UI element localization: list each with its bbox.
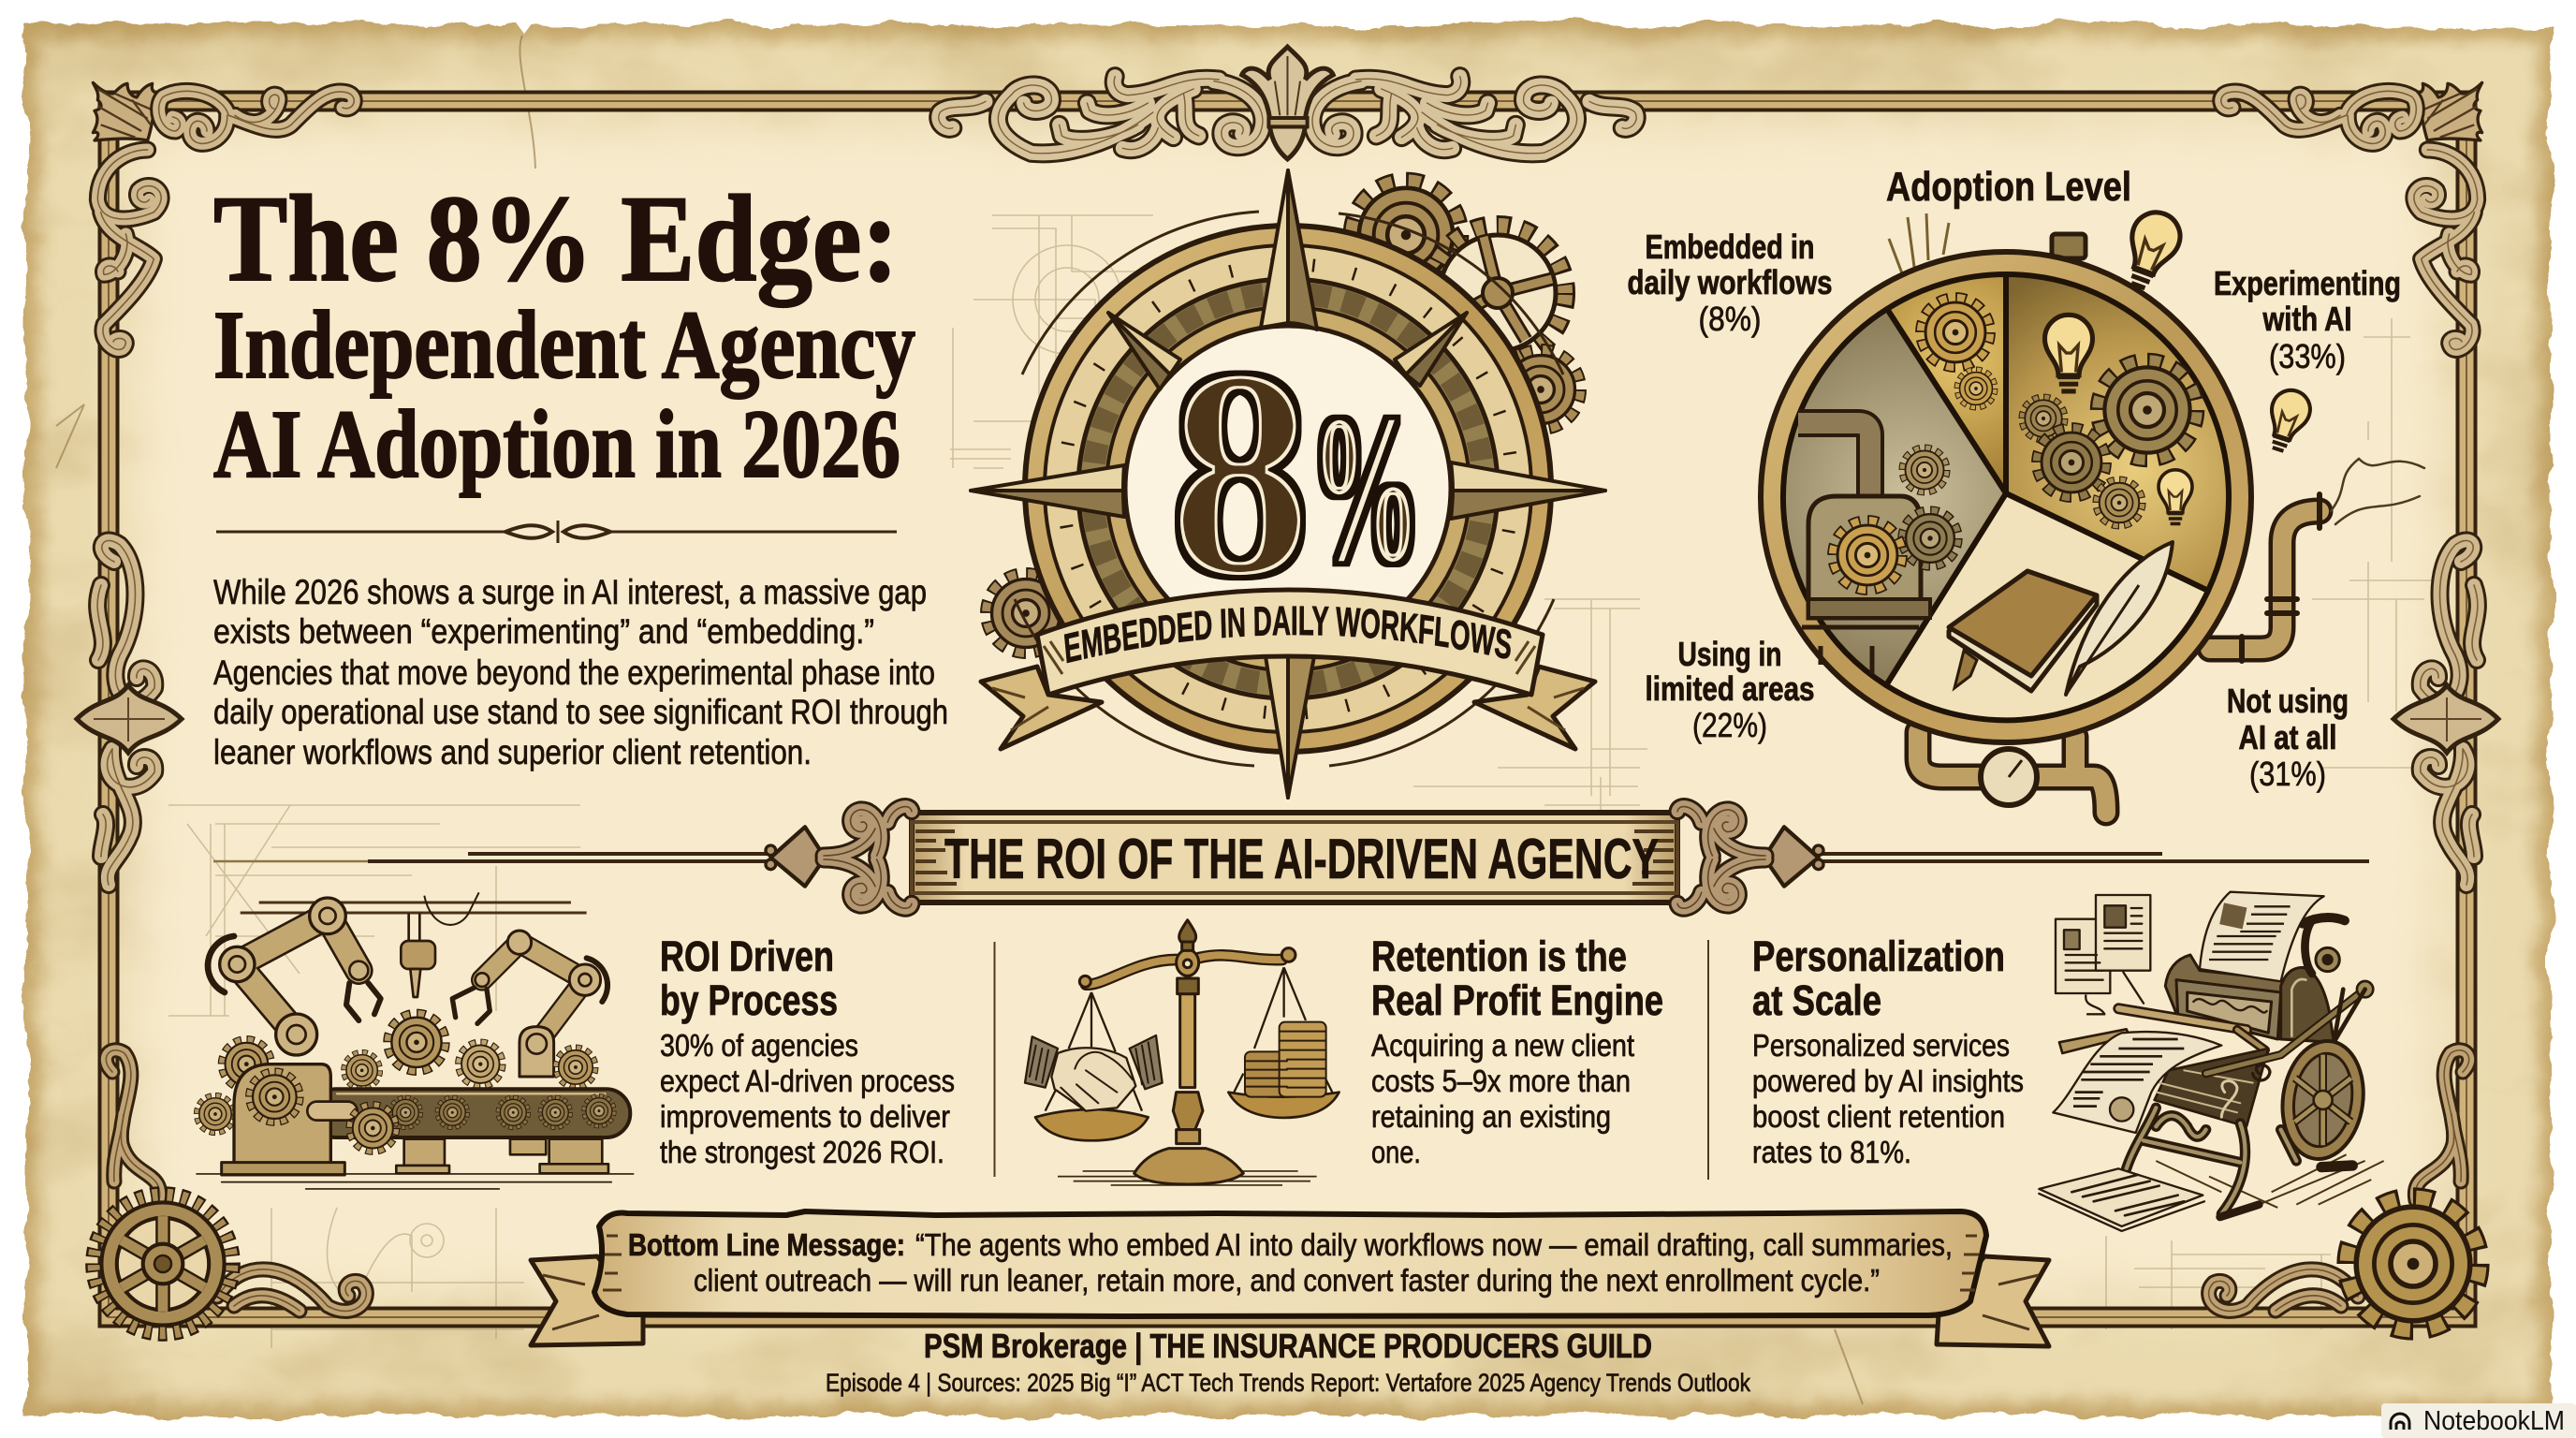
card: retention is the real profit engine: Real Profit Engine	[1371, 976, 1663, 1024]
title: The 8% Edge:	[213, 169, 899, 307]
intro paragraph: leaner workflows and superior client retention.	[213, 733, 812, 771]
arm: right	[452, 931, 607, 1077]
big 8% figure	[1170, 308, 1421, 638]
label: limited: Using in	[1677, 635, 1782, 673]
big 8% figure: 8	[1170, 308, 1310, 638]
label: experimenting: (33%)	[2269, 337, 2346, 375]
corner gear: bottom right	[2209, 1050, 2478, 1328]
title: Independent Agency	[213, 291, 915, 399]
label: not using: (31%)	[2249, 755, 2326, 793]
floor hatching	[2156, 1154, 2384, 1208]
card: personalization at scale	[1752, 932, 2024, 1169]
pie rim	[1761, 252, 2251, 742]
message text: client outreach — will run leaner, retain more, and convert faster during the next enrollment cycle.”	[694, 1263, 1880, 1298]
intro paragraph: daily operational use stand to see significant ROI through	[213, 693, 948, 731]
card: personalization at scale: at Scale	[1752, 976, 1881, 1024]
card: retention is the real profit engine	[1371, 932, 1663, 1169]
card: ROI driven by process	[660, 932, 955, 1169]
card: retention is the real profit engine: Acquiring a new client	[1371, 1028, 1634, 1063]
banner scroll: right	[1677, 807, 1823, 908]
gears	[198, 1014, 595, 1132]
illustration: robot arms on gear conveyor	[197, 892, 634, 1189]
card: retention is the real profit engine: Retention is the	[1371, 932, 1627, 980]
intro paragraph: Agencies that move beyond the experimental phase into	[213, 653, 935, 692]
compass medallion: 8% embedded in daily workflows	[792, 169, 1607, 835]
scale hangers	[1046, 967, 1332, 1111]
corner ornament: top right	[2221, 82, 2482, 349]
label: not using	[2227, 682, 2349, 793]
title: AI Adoption in 2026	[213, 390, 900, 498]
corner gear: bottom left	[95, 1050, 366, 1331]
steam pipes and fittings	[1918, 459, 2424, 813]
floating documents	[2056, 895, 2150, 1014]
label: experimenting: Experimenting	[2214, 264, 2401, 302]
label: not using: Not using	[2227, 682, 2349, 720]
beam and pillar	[1079, 920, 1295, 1184]
faint blueprint sketches	[168, 215, 2434, 1348]
wedge: limited 22%	[1783, 309, 2006, 685]
section banner: the ROI of the AI-driven agency	[213, 807, 2369, 908]
label: embedded	[1627, 227, 1833, 338]
top centre ornament	[939, 47, 1636, 159]
NotebookLM watermark	[2381, 1403, 2576, 1438]
label: experimenting	[2214, 264, 2401, 375]
lever arm	[2206, 981, 2373, 1080]
title divider	[216, 521, 897, 543]
flywheel	[2276, 1035, 2371, 1165]
bottom line message banner	[531, 1211, 2049, 1346]
wedge artwork: gears and bulbs	[1922, 299, 2196, 525]
title	[213, 169, 915, 498]
banner scroll: left	[766, 807, 912, 908]
output sheet	[2053, 1032, 2221, 1133]
card: retention is the real profit engine: costs 5–9x more than	[1371, 1064, 1631, 1098]
label: embedded: daily workflows	[1627, 263, 1833, 301]
card: ROI driven by process: the strongest 2026 ROI.	[660, 1135, 944, 1169]
card: retention is the real profit engine: retaining an existing	[1371, 1099, 1611, 1134]
press housing and ornamental panel	[2165, 917, 2345, 1042]
wedge artwork: book and quill	[1949, 542, 2173, 695]
card: personalization at scale: Personalized services	[1752, 1028, 2010, 1063]
wedge: not using 31%	[1886, 493, 2208, 720]
handshake	[1025, 1035, 1163, 1111]
label: limited: (22%)	[1692, 706, 1767, 744]
card: ROI driven by process: improvements to deliver	[660, 1099, 950, 1134]
intro paragraph: While 2026 shows a surge in AI interest, a massive gap	[213, 573, 927, 611]
pan: left	[1035, 1109, 1149, 1140]
card: ROI driven by process: expect AI-driven process	[660, 1064, 955, 1098]
message text: Bottom Line Message:	[628, 1227, 905, 1262]
arm: left	[208, 898, 381, 1055]
label: not using: AI at all	[2239, 718, 2336, 756]
ribbon: embedded in daily workflows	[979, 588, 1597, 751]
ring bands	[1025, 226, 1551, 752]
wedge artwork: steam machine	[1798, 423, 1957, 674]
card: personalization at scale: Personalization	[1752, 932, 2005, 980]
adoption level chart	[1627, 164, 2424, 813]
conveyor belt	[312, 1089, 630, 1173]
label: limited: limited areas	[1646, 669, 1814, 708]
footer sources: Episode 4 | Sources: 2025 Big “I” ACT Tech Trends Report: Vertafore 2025 Agency Trends Outlook	[826, 1369, 1750, 1397]
chart heading: Adoption Level	[1886, 164, 2131, 210]
press bed	[2155, 1049, 2268, 1126]
pan and coins: right	[1228, 1022, 1339, 1118]
side ornament: left	[77, 540, 182, 885]
message text: “The agents who embed AI into daily workflows now — email drafting, call summaries,	[915, 1227, 1953, 1262]
label: experimenting: with AI	[2262, 300, 2351, 338]
message text	[628, 1227, 1953, 1298]
machine housing	[197, 1064, 634, 1189]
illustration: printing press with personalized pages	[2039, 892, 2384, 1231]
banner heading: THE ROI OF THE AI-DRIVEN AGENCY	[944, 828, 1659, 890]
NotebookLM watermark: NotebookLM	[2423, 1406, 2565, 1436]
label: limited	[1646, 635, 1814, 744]
card: personalization at scale: boost client retention	[1752, 1099, 2005, 1134]
side ornament: right	[2393, 540, 2498, 885]
card: ROI driven by process: ROI Driven	[660, 932, 834, 980]
card: ROI driven by process: 30% of agencies	[660, 1028, 858, 1063]
intro paragraph	[213, 573, 948, 771]
card: retention is the real profit engine: one.	[1371, 1135, 1421, 1169]
corner ornament: top left	[93, 82, 354, 349]
drill head	[401, 915, 435, 997]
label: embedded: (8%)	[1698, 300, 1762, 338]
wedge: experimenting 33%	[2006, 274, 2229, 591]
card: personalization at scale: rates to 81%.	[1752, 1135, 1911, 1169]
card: personalization at scale: powered by AI insights	[1752, 1064, 2024, 1098]
input tray and roller	[2059, 1008, 2265, 1053]
wedge: embedded 8%	[1887, 274, 2006, 493]
paper stack	[2039, 1168, 2204, 1231]
ribbon: embedded in daily workflows: EMBEDDED IN DAILY WORKFLOWS	[1063, 606, 1511, 663]
label: embedded: Embedded in	[1646, 227, 1814, 266]
intro paragraph: exists between “experimenting” and “embedding.”	[213, 612, 874, 651]
top sheet	[2200, 892, 2324, 981]
footer brand line: PSM Brokerage | THE INSURANCE PRODUCERS GUILD	[924, 1327, 1652, 1366]
legs and crossbars	[2127, 1108, 2352, 1217]
gears behind the medallion	[988, 182, 1579, 652]
card: ROI driven by process: by Process	[660, 976, 838, 1024]
illustration: balance scale with handshake and coins	[1025, 920, 1339, 1185]
compass points	[971, 170, 1605, 798]
big 8% figure: %	[1310, 372, 1421, 606]
